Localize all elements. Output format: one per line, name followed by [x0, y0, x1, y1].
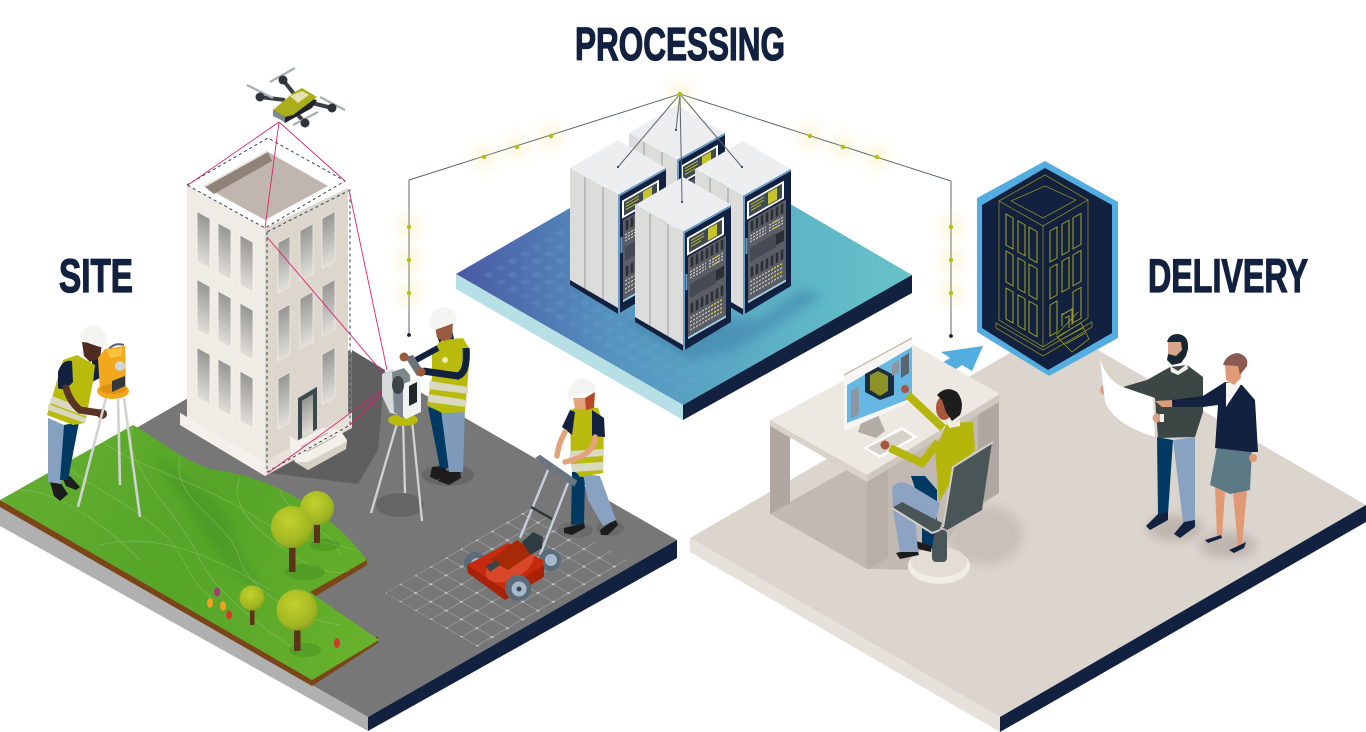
desk	[770, 338, 1023, 570]
surveyor with laser scanner	[371, 307, 474, 521]
server rack: right	[695, 141, 791, 315]
ground scan grid	[385, 507, 628, 647]
trousers	[428, 407, 449, 468]
tablet and hands	[405, 355, 424, 376]
panel: delivery platform	[690, 340, 1366, 732]
light leg	[892, 482, 940, 552]
platform right side	[368, 540, 677, 731]
entrance steps	[290, 428, 347, 470]
front leg	[867, 464, 888, 569]
surveyor with total station	[47, 325, 140, 517]
left leg	[770, 421, 790, 514]
office worker at desk	[880, 385, 993, 584]
arms	[557, 432, 595, 462]
rotors	[247, 68, 345, 125]
connector network	[396, 81, 964, 338]
chair floor shadow	[947, 505, 1023, 565]
keyboard	[863, 427, 918, 458]
man head	[1168, 340, 1185, 364]
platform right side	[683, 275, 912, 420]
back wheels	[464, 552, 486, 574]
shoes	[564, 523, 585, 535]
flowers	[214, 588, 220, 596]
platform left side	[456, 274, 683, 420]
drone body	[273, 96, 317, 123]
tree back	[314, 520, 320, 543]
grass fold shading	[150, 450, 300, 615]
head	[82, 342, 102, 362]
roof	[187, 138, 348, 228]
server rack: back	[629, 105, 725, 279]
shadow	[422, 464, 474, 486]
shoes	[896, 548, 919, 559]
grass contours	[20, 425, 355, 660]
drone	[247, 68, 345, 128]
man shoes	[1146, 512, 1168, 530]
right wall	[265, 188, 352, 476]
chair base	[908, 548, 970, 584]
wireframe door and stairs	[1062, 309, 1072, 328]
dark leg	[911, 476, 937, 548]
vest	[47, 355, 95, 425]
woman head	[1225, 365, 1241, 385]
left windows	[197, 212, 253, 428]
plan sheet	[1100, 358, 1155, 437]
man hand on sheet	[1100, 385, 1108, 395]
blue arrow	[926, 346, 983, 380]
wireframe left windows	[1006, 214, 1037, 337]
server rack: front	[635, 177, 731, 351]
man trousers	[1157, 437, 1173, 514]
logo	[442, 357, 448, 363]
heading: processing: PROCESSING	[575, 18, 785, 70]
total station instrument	[108, 344, 124, 350]
chair back	[942, 442, 992, 530]
woman shoes	[1205, 535, 1222, 543]
woman skirt	[1210, 447, 1252, 494]
grass	[0, 425, 379, 680]
3D model hexagon	[977, 161, 1118, 376]
screen side lists	[851, 386, 859, 419]
sleeves	[562, 410, 575, 435]
navy shirt	[92, 358, 101, 382]
right windows	[278, 212, 335, 429]
arm	[66, 388, 100, 413]
neck	[437, 330, 455, 345]
screen hexagon	[865, 367, 894, 400]
shadows	[557, 522, 593, 538]
shoes	[430, 466, 447, 480]
head	[936, 396, 952, 420]
shoes	[50, 482, 68, 501]
handle bar	[537, 456, 576, 485]
grass edge	[0, 500, 378, 686]
shadows	[1147, 515, 1203, 541]
platform tiles	[472, 215, 760, 392]
man torso	[1123, 365, 1203, 438]
handle rods	[520, 470, 568, 555]
surveyor with ground radar	[557, 378, 624, 538]
head	[435, 322, 453, 341]
desk shadow	[770, 398, 999, 570]
vest	[570, 406, 604, 477]
server rack: left	[570, 140, 666, 314]
hands	[901, 385, 909, 393]
door	[298, 387, 317, 440]
body	[467, 543, 544, 600]
laser scanner	[382, 369, 400, 415]
front wheel	[505, 575, 531, 601]
monitor stand	[858, 415, 885, 438]
building shadow	[270, 350, 385, 484]
trousers	[571, 470, 585, 525]
tree lower	[294, 628, 300, 651]
tree small	[250, 608, 254, 625]
vest	[427, 338, 470, 413]
woman legs	[1215, 487, 1225, 537]
right leg	[978, 398, 999, 504]
monitor	[844, 338, 912, 431]
panel: site platform	[0, 328, 677, 731]
dashed scan outline	[187, 138, 350, 472]
sleeve	[58, 361, 73, 389]
platform left side	[0, 507, 368, 731]
tripod	[371, 420, 422, 521]
torso	[935, 422, 975, 502]
desk top	[770, 344, 1000, 475]
left wall	[180, 185, 265, 470]
building	[180, 138, 352, 476]
chair seat	[892, 502, 942, 535]
bag	[522, 532, 543, 555]
panel: processing platform	[456, 105, 912, 420]
arms	[890, 395, 943, 463]
platform left side	[690, 538, 1000, 732]
wireframe right windows	[1050, 213, 1081, 336]
arms	[423, 348, 466, 376]
trousers	[48, 418, 64, 484]
people reviewing plan	[1100, 334, 1258, 558]
woman jacket and arm	[1172, 382, 1258, 452]
plinth	[180, 413, 265, 476]
wireframe building	[996, 175, 1092, 356]
tripod	[78, 398, 140, 517]
heading: site: SITE	[59, 249, 133, 302]
trees and flowers	[207, 491, 340, 657]
platform right side	[1000, 505, 1366, 732]
head	[573, 398, 594, 410]
chair column	[932, 530, 947, 562]
tree shadows	[285, 564, 325, 580]
rack shadow	[620, 290, 825, 360]
laser scan lines	[188, 122, 387, 473]
ground radar cart	[464, 456, 576, 601]
tree front	[289, 545, 296, 572]
